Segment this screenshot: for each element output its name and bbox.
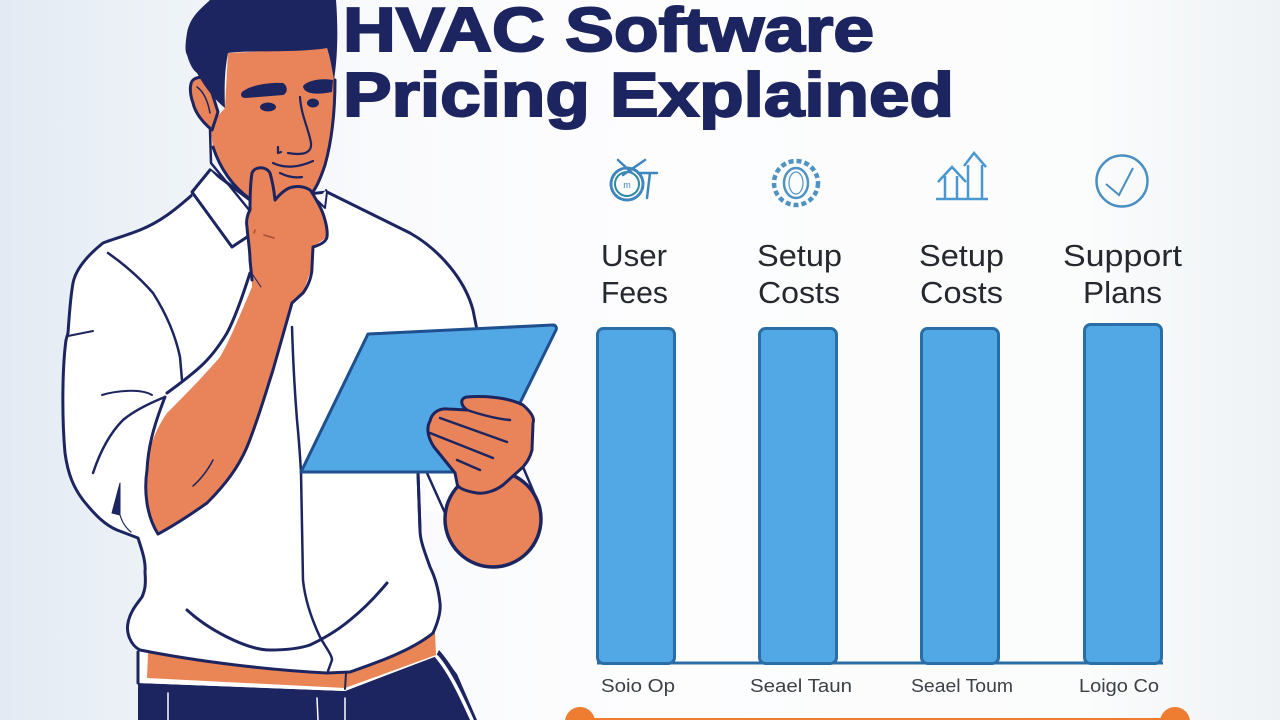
column headings: Support [1063, 238, 1182, 273]
thinking hand [247, 168, 327, 303]
belt [138, 630, 437, 691]
bar labels [601, 675, 1159, 696]
elbow [445, 471, 541, 567]
bar labels: Seael Taun [750, 675, 852, 696]
column headings: Plans [1083, 275, 1162, 310]
shirt [63, 170, 477, 673]
column headings: Costs [920, 275, 1003, 310]
title [343, 0, 954, 130]
collar [192, 170, 327, 247]
icon: support check [1096, 156, 1148, 206]
column headings: Setup [919, 238, 1004, 273]
hair [186, 0, 337, 108]
holding hand [428, 397, 534, 493]
trousers [138, 650, 477, 720]
column headings [601, 238, 1182, 310]
illustration: man reading tablet [63, 0, 556, 720]
forearm raised [146, 270, 305, 534]
icon: growth arrows [936, 153, 988, 199]
bar chart [597, 324, 1163, 664]
column headings: Costs [758, 275, 840, 310]
orange range bar [565, 707, 1190, 720]
column headings: User [601, 238, 667, 273]
icon: user fees [611, 160, 657, 200]
nose and mouth [273, 97, 313, 177]
ear [190, 77, 218, 130]
right sleeve [418, 467, 540, 530]
tablet [301, 325, 556, 472]
title: Pricing Explained [343, 61, 954, 130]
bar labels: Soio Op [601, 675, 675, 696]
column headings: Setup [757, 238, 842, 273]
shirt folds [68, 253, 387, 671]
column headings: Fees [601, 275, 668, 310]
bar labels: Seael Toum [911, 675, 1013, 696]
bar labels: Loigo Co [1079, 675, 1159, 696]
icon: setup costs coin [774, 161, 818, 205]
neck and face [210, 48, 335, 211]
icon: user fees: m [623, 180, 631, 190]
eyebrows and eyes [241, 79, 333, 112]
